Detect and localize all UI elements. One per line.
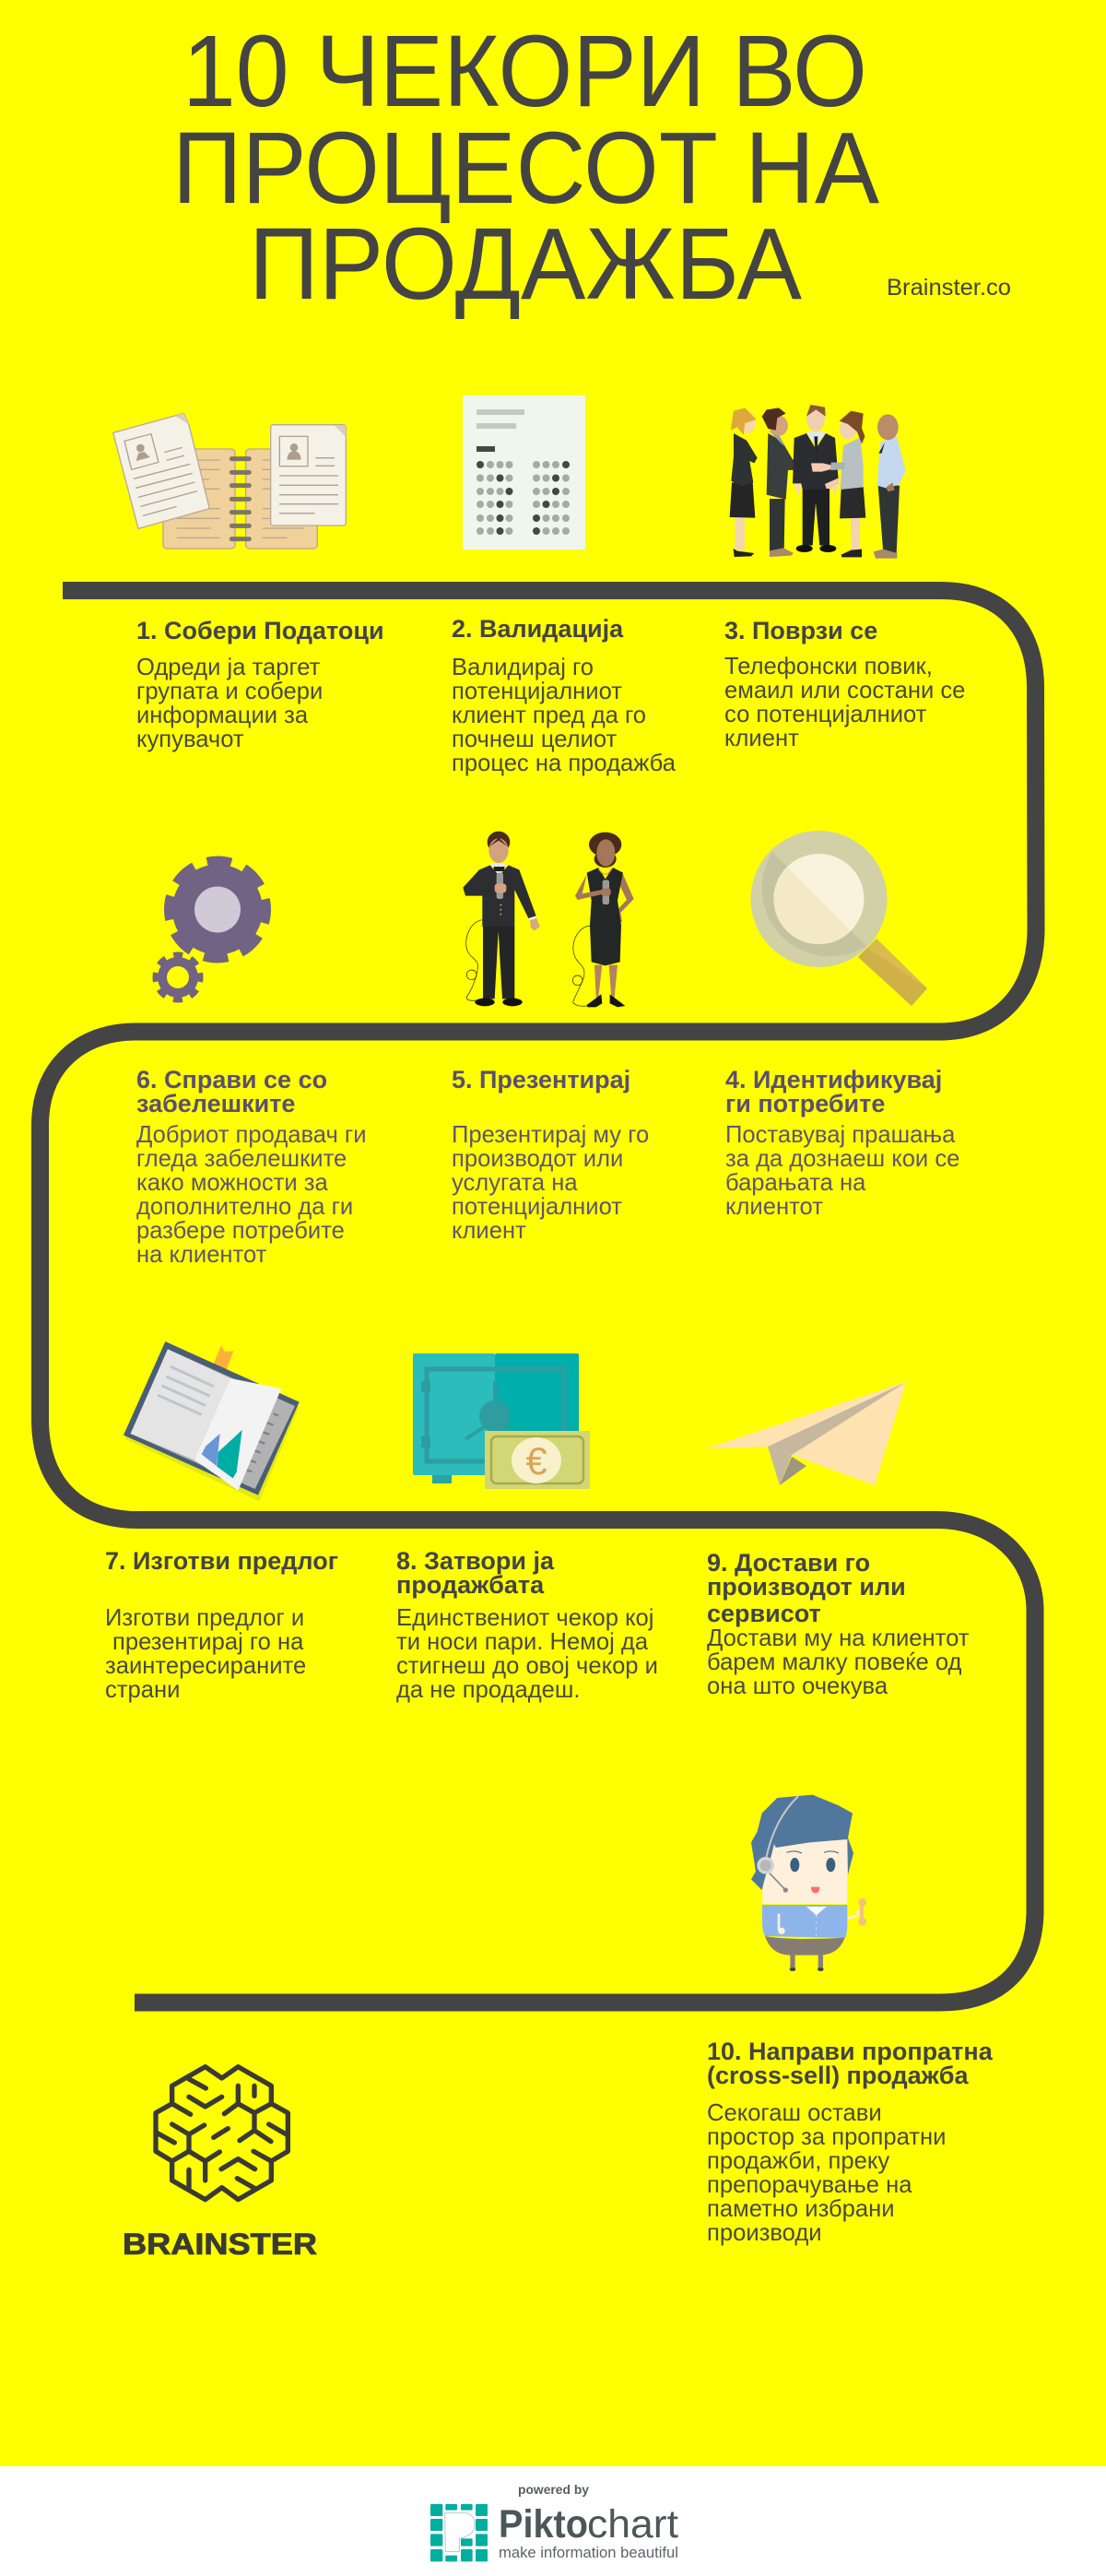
step 2: потенцијалниот [452, 679, 622, 704]
step 2: клиент пред да го [452, 703, 646, 728]
step 10: препорачување на [707, 2172, 912, 2198]
step 3: клиент [724, 726, 799, 751]
footer: powered by Piktochart: chart [587, 2502, 678, 2546]
step 10: продажби, преку [707, 2148, 889, 2174]
step 5: услугата на [452, 1170, 578, 1196]
step 10: 10. Направи пропратна [707, 2038, 994, 2065]
step 6: како можности за [136, 1170, 329, 1196]
step 3 [724, 617, 965, 751]
step 7: заинтересираните [105, 1653, 306, 1679]
step 1: информации за [136, 703, 309, 728]
step 5 [452, 1066, 649, 1244]
icon: safe with euro banknote [413, 1353, 590, 1489]
step 8: 8. Затвори ја [396, 1547, 555, 1575]
step 8 [396, 1547, 658, 1703]
step 1: групата и собери [136, 679, 323, 704]
icon: Brainster brain logo [156, 2067, 288, 2200]
step 6: Добриот продавач ги [136, 1122, 367, 1148]
icon: Piktochart mark [430, 2504, 488, 2561]
step 10: Секогаш остави [707, 2100, 882, 2126]
step 6: 6. Справи се со [136, 1066, 327, 1093]
icon: data sheet [463, 396, 585, 549]
winding road connecting the steps [41, 590, 1036, 2003]
step 4: клиентот [725, 1194, 823, 1220]
step 8: стигнеш до овој чекор и [396, 1653, 658, 1679]
footer: powered by Piktochart [430, 2482, 678, 2561]
step 6: гледа забелешките [136, 1146, 347, 1172]
step 7: презентирај го на [112, 1629, 304, 1655]
title: ПРОДАЖБА [249, 207, 803, 321]
step 9: она што очекува [707, 1673, 888, 1699]
step 2: почнеш целиот [452, 727, 618, 752]
step 1: Одреди ја таргет [136, 655, 321, 680]
step 9: 9. Достави го [707, 1549, 870, 1577]
step 8: ти носи пари. Немој да [396, 1629, 649, 1655]
step 10 [707, 2038, 994, 2246]
step 2: процес на продажба [452, 750, 677, 776]
icon: two presenters with microphones [463, 832, 634, 1007]
icon: safe with euro banknote: € [525, 1439, 547, 1483]
footer: powered by Piktochart: make information beautiful [499, 2544, 678, 2561]
step 1: купувачот [136, 727, 244, 752]
step 6: разбере потребите [136, 1218, 345, 1244]
footer: powered by Piktochart: powered by [518, 2482, 589, 2497]
step 2 [452, 615, 677, 776]
step 9: производот или [707, 1573, 906, 1601]
step 4: за да дознаеш кои се [725, 1146, 959, 1172]
step 8: Единствениот чекор кој [396, 1605, 653, 1631]
title [172, 15, 880, 321]
step 3: емаил или состани се [724, 678, 965, 703]
brand link text: Brainster.co [887, 275, 1011, 301]
step 9 [707, 1549, 970, 1699]
title: 10 ЧЕКОРИ ВО [182, 15, 867, 128]
step 6: дополнително да ги [136, 1194, 353, 1220]
icon: magnifying glass [750, 831, 927, 1006]
step 8: продажбата [396, 1571, 545, 1599]
step 3: 3. Поврзи се [724, 617, 877, 644]
step 10: (cross-sell) продажба [707, 2062, 969, 2089]
step 3: со потенцијалниот [724, 702, 927, 727]
step 10: производи [707, 2220, 822, 2246]
icon: business people shaking hands [730, 405, 906, 559]
icon: notebook with resumes [113, 413, 346, 549]
step 4: барањата на [725, 1170, 866, 1196]
step 5: производот или [452, 1146, 623, 1172]
step 6: забелешките [136, 1090, 295, 1117]
step 2: Валидирај го [452, 655, 594, 680]
step 3: Телефонски повик, [724, 654, 933, 679]
icon: paper plane [707, 1382, 906, 1485]
step 8: да не продадеш. [396, 1677, 581, 1703]
brand name: BRAINSTER [123, 2227, 317, 2261]
step 7: страни [105, 1677, 180, 1703]
step 9: сервисот [707, 1600, 821, 1627]
step 2: 2. Валидација [452, 615, 624, 643]
step 4: ги потребите [725, 1090, 885, 1117]
step 4 [725, 1066, 959, 1220]
step 1 [136, 617, 384, 752]
step 5: клиент [452, 1218, 526, 1244]
title: ПРОЦЕСОТ НА [172, 112, 880, 225]
icon: call-centre character [751, 1795, 866, 1971]
step 7 [105, 1547, 338, 1703]
step 9: Достави му на клиентот [707, 1625, 970, 1651]
step 4: Поставувај прашања [725, 1122, 956, 1148]
step 6 [136, 1066, 367, 1268]
step 5: потенцијалниот [452, 1194, 622, 1220]
icon: open book with bookmark [124, 1341, 300, 1501]
step 5: Презентирај му го [452, 1122, 649, 1148]
footer: powered by Piktochart: Pikto [499, 2502, 588, 2546]
icon: gears [155, 860, 267, 999]
step 10: простор за пропратни [707, 2124, 946, 2150]
step 7: 7. Изготви предлог [105, 1547, 338, 1575]
step 9: барем малку повеќе од [707, 1649, 961, 1675]
step 10: паметно избрани [707, 2196, 895, 2222]
step 4: 4. Идентификувај [725, 1066, 942, 1093]
step 1: 1. Собери Податоци [136, 617, 384, 644]
step 5: 5. Презентирај [452, 1066, 630, 1093]
step 6: на клиентот [136, 1242, 267, 1268]
step 7: Изготви предлог и [105, 1605, 304, 1631]
